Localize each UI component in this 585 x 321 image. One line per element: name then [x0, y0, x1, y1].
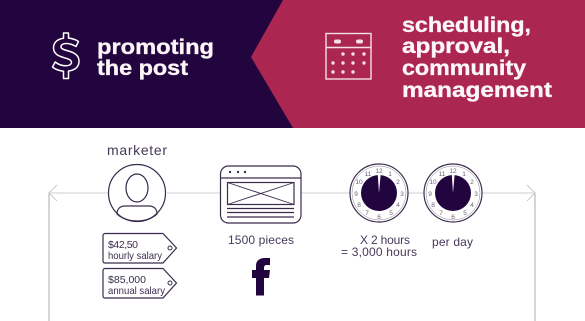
label: hours calculation: = 3,000 hours	[341, 245, 417, 259]
icon: calendar	[326, 34, 371, 79]
clock 2: 1	[462, 171, 466, 178]
panel: promoting the post	[0, 0, 585, 128]
clock 1: 2	[396, 179, 400, 186]
panel: scheduling, approval, community management	[251, 0, 585, 128]
icon: marketer avatar	[108, 164, 166, 222]
clock 2: 5	[463, 210, 467, 217]
label: hours calculation: X 2 hours	[360, 233, 410, 247]
clock 1: 12	[375, 168, 383, 175]
clock 1: 4	[396, 202, 400, 209]
clock 1: 5	[389, 210, 393, 217]
heading: scheduling list: management	[402, 79, 552, 102]
icon: facebook f	[252, 258, 270, 296]
label: marketer: marketer	[107, 142, 167, 158]
heading: scheduling list: approval,	[402, 35, 510, 58]
clock 2: 12	[449, 168, 457, 175]
heading: scheduling list	[402, 14, 552, 102]
salary tag: annual: annual salary	[108, 285, 166, 297]
clock 2: 7	[439, 210, 443, 217]
clock 2: 11	[439, 171, 446, 178]
clock 2: 4	[470, 202, 474, 209]
salary tag: annual: $85,000	[108, 274, 146, 286]
icon: browser window	[220, 166, 301, 223]
clock 1: 10	[355, 179, 363, 186]
icon: dollar sign	[52, 33, 79, 78]
clock 1	[350, 164, 408, 222]
timeline arrow lines	[49, 185, 535, 321]
label: per day: per day	[432, 235, 473, 249]
clock 1: 8	[357, 202, 361, 209]
clock 1: 7	[365, 210, 369, 217]
clock 2: 8	[431, 202, 435, 209]
heading: promoting the post: the post	[97, 57, 188, 80]
heading: scheduling list: scheduling,	[402, 14, 531, 37]
clock 1: 9	[354, 191, 358, 198]
salary tag: annual	[103, 268, 176, 298]
clock 2: 3	[474, 191, 478, 198]
clock 1: 6	[377, 214, 381, 221]
heading: promoting the post: promoting	[97, 36, 214, 59]
salary tag: hourly: hourly salary	[108, 250, 163, 262]
clock 2: 10	[429, 179, 437, 186]
salary tag: hourly	[103, 234, 176, 263]
clock 2: 2	[470, 179, 474, 186]
clock 2: 6	[451, 214, 455, 221]
salary tag: hourly: $42,50	[108, 239, 138, 251]
label: 1500 pieces: 1500 pieces	[228, 233, 294, 247]
clock 1: 1	[388, 171, 392, 178]
heading: promoting the post	[97, 36, 214, 80]
clock 1: 3	[400, 191, 404, 198]
clock 2	[424, 164, 482, 222]
clock 1: 11	[365, 171, 372, 178]
heading: scheduling list: community	[402, 57, 526, 80]
label: hours calculation	[341, 233, 417, 259]
clock 2: 9	[428, 191, 432, 198]
